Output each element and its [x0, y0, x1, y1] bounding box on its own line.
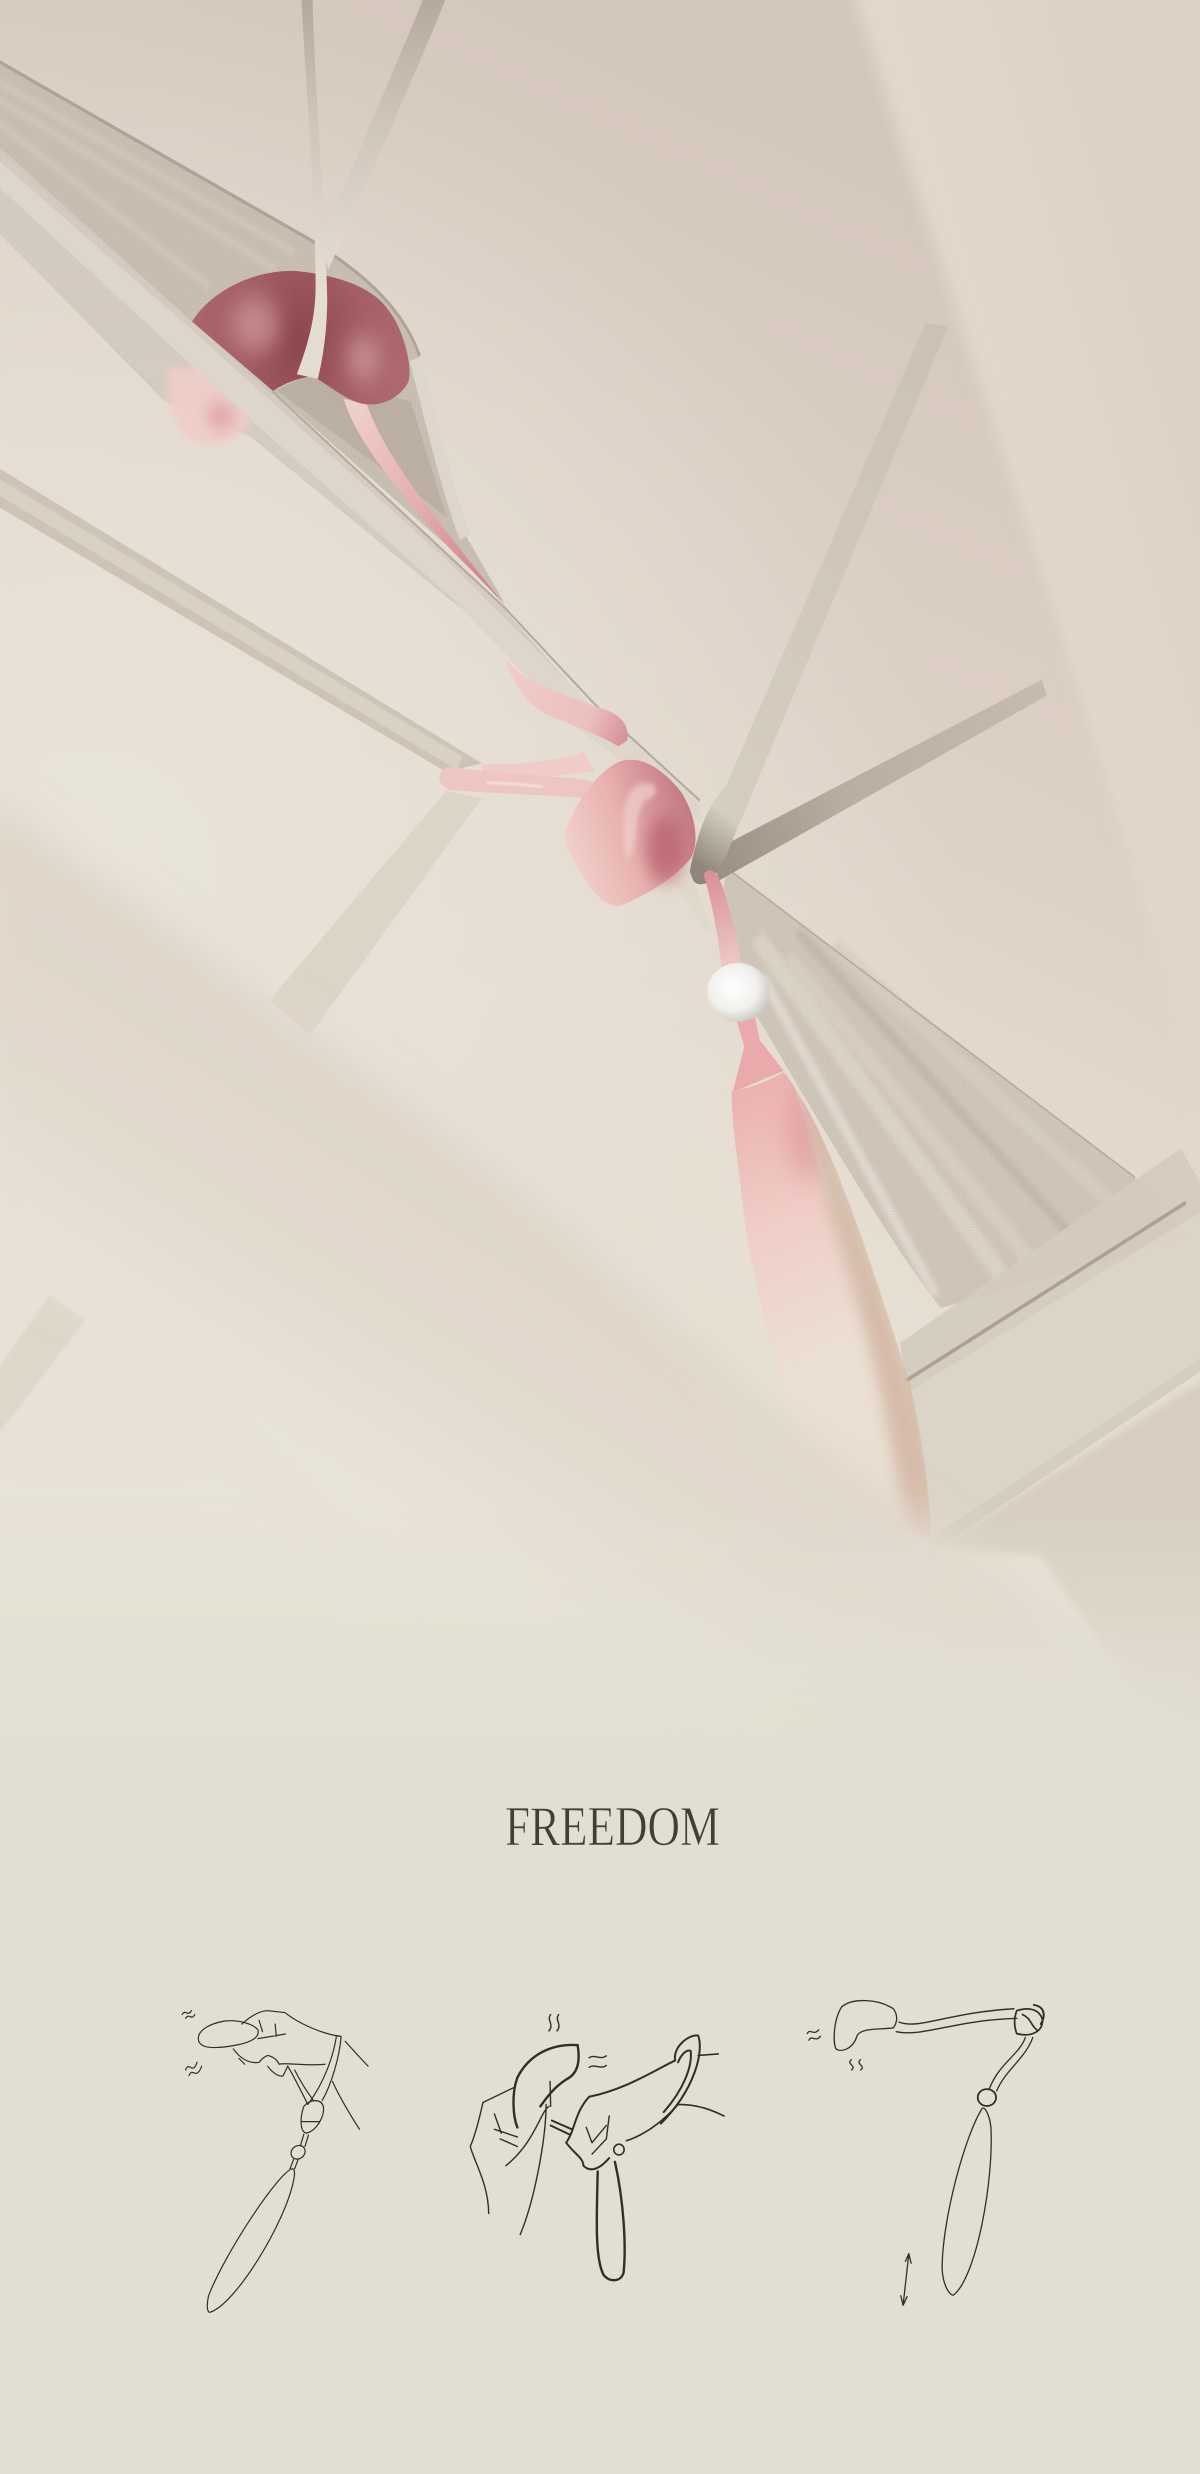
wide mesh fan [724, 874, 1136, 1308]
hanging strap left [297, 0, 327, 379]
strap upward [690, 323, 948, 884]
lobe highlight left [230, 296, 279, 353]
upper scene: net, lobes and straps [0, 0, 700, 821]
strap to the right [711, 680, 1047, 881]
lobe highlight right [348, 337, 380, 381]
lobe body [192, 271, 410, 404]
fan folds [754, 930, 1068, 1297]
lower pink lobe emerging from strap [504, 657, 628, 746]
ring tube lower [439, 767, 594, 799]
illustrations [182, 2001, 1044, 2312]
mesh fold streaks [0, 80, 295, 287]
fold shadow [798, 932, 1073, 1238]
fold mid [788, 957, 1033, 1263]
pink tube from upper lobe [344, 399, 505, 606]
mesh side rim band [415, 359, 465, 537]
rose top shading [788, 1078, 829, 1180]
pink block [565, 760, 696, 906]
lower mesh behind band [955, 1382, 1200, 1626]
title: FREEDOM [505, 1796, 720, 1858]
hero: photographic scene [0, 0, 1200, 1770]
long pink handle [727, 1066, 936, 1550]
hero fade to base [0, 1500, 1200, 1770]
illustration 2: two hands bending device [470, 2014, 724, 2280]
back mesh sheet [0, 57, 504, 603]
band dark seam [905, 1203, 1186, 1381]
fan top rim [727, 868, 1135, 1177]
back mesh texture [0, 57, 504, 603]
fan texture [721, 868, 1186, 1308]
blurred pink lobe seen through mesh [167, 367, 252, 445]
fold light [757, 938, 1002, 1276]
backdrop light area at left [0, 251, 651, 810]
backdrop gradient [0, 0, 1188, 1114]
block body [565, 760, 696, 906]
ring tube upper [482, 752, 595, 777]
long strap from the left [0, 466, 482, 772]
white bead [707, 963, 769, 1022]
upper rose lobe [192, 271, 410, 404]
blurred curtain at top right [855, 0, 1200, 772]
main strap shadow line [272, 391, 700, 801]
blurred foreground fabric [0, 790, 1180, 1720]
band light fold [910, 1212, 1200, 1538]
block rose shade [646, 816, 685, 882]
strap running down from ring to the left [270, 791, 482, 1035]
horizontal wide band [900, 1149, 1200, 1554]
mesh top rim [0, 60, 420, 356]
long strap highlight [0, 485, 460, 763]
ring tube highlight [487, 782, 543, 787]
inner triangle shadow [277, 373, 446, 517]
illustration 1: hand holding device [182, 2011, 368, 2312]
strap lower-left segment [0, 1298, 82, 1431]
front mesh texture [0, 150, 552, 665]
pink stem below block [704, 870, 741, 967]
hanging strap right [322, 0, 446, 270]
handle base [727, 1066, 936, 1550]
right net and straps [439, 323, 1200, 1742]
stem under bead [733, 1015, 784, 1092]
block soft highlight [623, 783, 656, 861]
illustration 3: device and arrow [807, 2001, 1044, 2305]
fold upper [834, 944, 1114, 1206]
right edge shading [798, 1085, 936, 1550]
rose spot through mesh [206, 402, 236, 430]
strap below block [673, 868, 714, 932]
main gathered strap [0, 164, 586, 703]
fold lower [762, 976, 936, 1295]
front mesh sheet [0, 144, 589, 706]
